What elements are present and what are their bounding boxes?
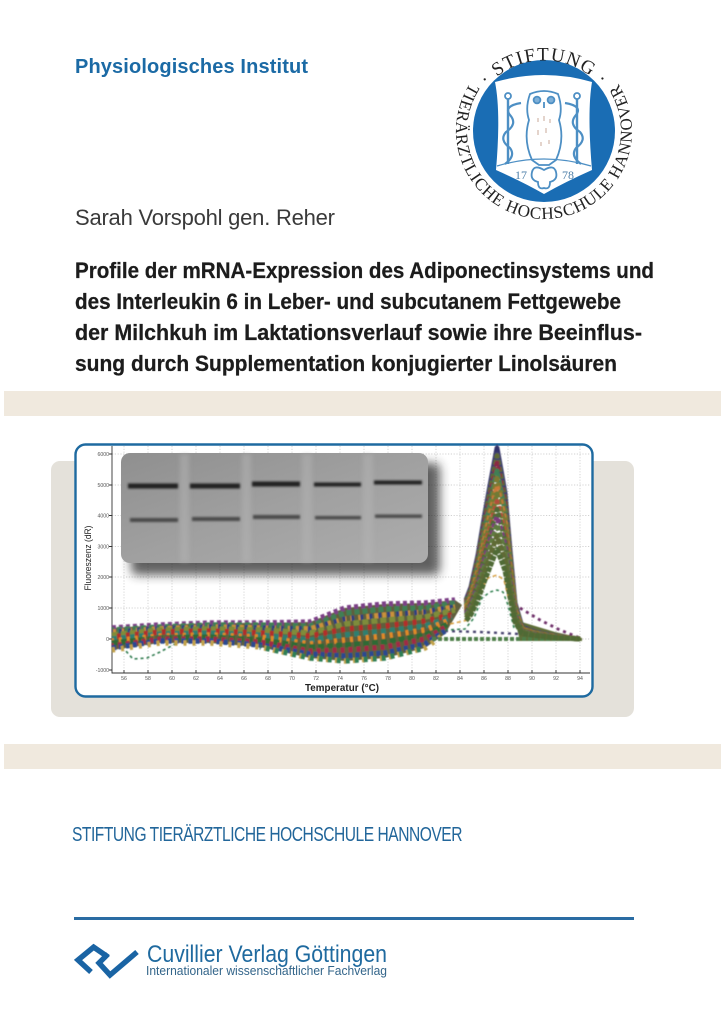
icon: university seal: 78 xyxy=(562,168,574,182)
x axis numbers: 64 xyxy=(217,676,223,682)
institute heading: Physiologisches Institut xyxy=(75,56,308,78)
x axis numbers: 62 xyxy=(193,676,199,682)
x axis numbers: 66 xyxy=(241,676,247,682)
panel: melting curve chart xyxy=(76,444,592,696)
upper gel bands xyxy=(128,480,422,488)
panel: beige chart backing xyxy=(51,461,634,717)
y axis numbers: 6000 xyxy=(97,452,109,458)
baseline traces xyxy=(432,575,580,639)
x axis numbers: 80 xyxy=(409,676,415,682)
x axis numbers: 58 xyxy=(145,676,151,682)
data curves xyxy=(112,444,582,661)
icon: university seal: TIERÄRZTLICHE HOCHSCHULE HANNOVER xyxy=(456,84,632,220)
y axis numbers: 0 xyxy=(106,637,109,643)
y axis numbers: 4000 xyxy=(97,514,109,520)
x axis numbers xyxy=(121,676,583,682)
x axis numbers: 82 xyxy=(433,676,439,682)
upper beige strip xyxy=(4,391,721,416)
x axis numbers: 84 xyxy=(457,676,463,682)
icon: university seal: · STIFTUNG · xyxy=(484,48,604,80)
title: sung durch Supplementation konjugierter Linolsäuren xyxy=(75,351,617,376)
x axis numbers: 68 xyxy=(265,676,271,682)
title: der Milchkuh im Laktationsverlauf sowie ihre Beeinflus- xyxy=(75,320,642,345)
x axis numbers: 86 xyxy=(481,676,487,682)
title: Profile der mRNA-Expression des Adiponectinsystems und xyxy=(75,258,654,283)
author: Sarah Vorspohl gen. Reher xyxy=(75,205,335,230)
institution name: STIFTUNG TIERÄRZTLICHE HOCHSCHULE HANNOVER xyxy=(72,824,462,846)
chart axes xyxy=(109,446,590,673)
publisher rule xyxy=(74,917,634,920)
left staff with serpent xyxy=(505,93,511,99)
y axis numbers: -1000 xyxy=(96,668,109,674)
x axis numbers: 78 xyxy=(385,676,391,682)
x axis numbers: 74 xyxy=(337,676,343,682)
ground xyxy=(497,159,591,166)
x axis numbers: 72 xyxy=(313,676,319,682)
x axis label: Temperatur (°C) xyxy=(305,683,379,694)
lower beige strip xyxy=(4,744,721,769)
publisher name: Cuvillier Verlag Göttingen xyxy=(147,941,387,968)
y axis numbers: 3000 xyxy=(97,544,109,550)
lower gel bands xyxy=(130,514,422,522)
x axis numbers: 76 xyxy=(361,676,367,682)
y axis numbers: 5000 xyxy=(97,483,109,489)
y axis label: Fluoreszenz (dR) xyxy=(83,526,94,590)
x axis numbers: 56 xyxy=(121,676,127,682)
icon: university seal: 17 xyxy=(515,168,527,182)
x axis numbers: 92 xyxy=(553,676,559,682)
y axis numbers: 1000 xyxy=(97,606,109,612)
x axis numbers: 90 xyxy=(529,676,535,682)
x axis numbers: 94 xyxy=(577,676,583,682)
owl body xyxy=(527,91,561,165)
title xyxy=(75,258,654,376)
publisher tagline: Internationaler wissenschaftlicher Fachverlag xyxy=(146,964,387,978)
trefoil xyxy=(532,167,556,188)
x axis numbers: 60 xyxy=(169,676,175,682)
title: des Interleukin 6 in Leber- und subcutanem Fettgewebe xyxy=(75,289,621,314)
icon: publisher logo xyxy=(78,946,137,975)
y axis numbers xyxy=(96,452,109,674)
x axis numbers: 88 xyxy=(505,676,511,682)
x axis numbers: 70 xyxy=(289,676,295,682)
y axis numbers: 2000 xyxy=(97,575,109,581)
gel electrophoresis image xyxy=(121,453,440,575)
melting peak xyxy=(466,448,580,639)
lane separators xyxy=(180,454,373,562)
right staff with serpent xyxy=(574,93,580,99)
